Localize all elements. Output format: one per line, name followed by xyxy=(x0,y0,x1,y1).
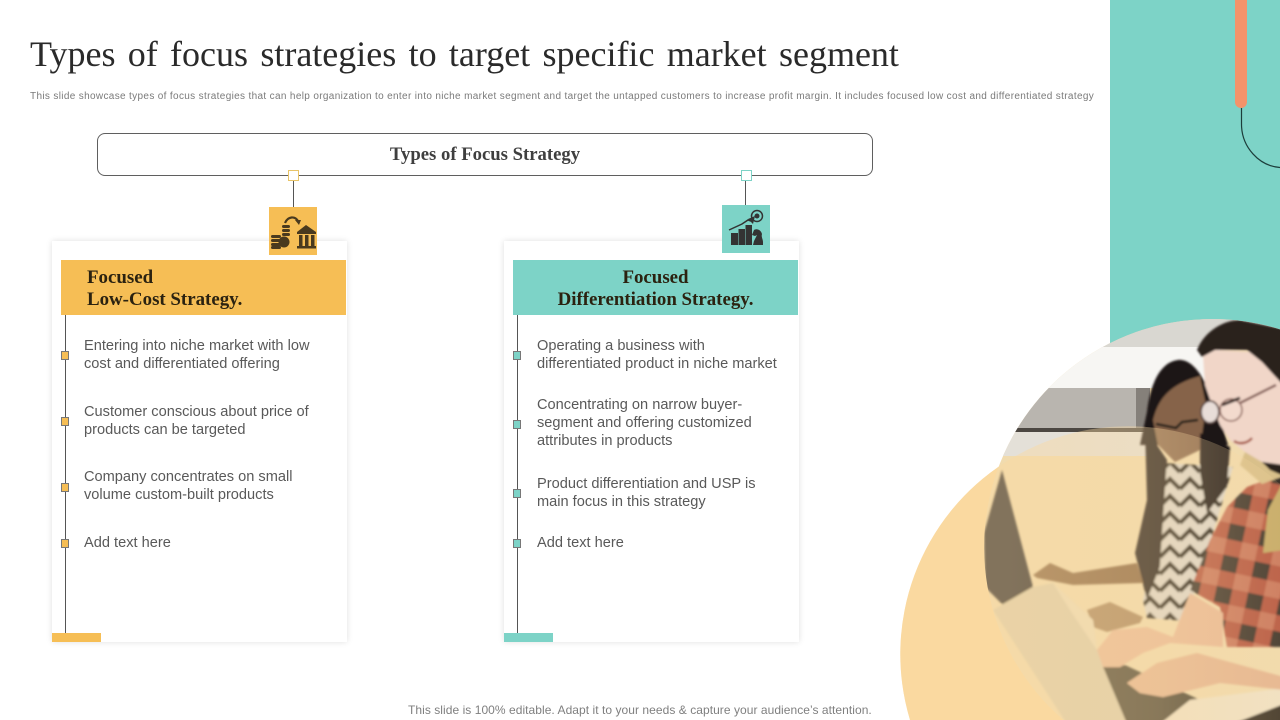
connector lines xyxy=(293,181,746,207)
footer tab xyxy=(504,633,553,642)
background woman braids xyxy=(1135,427,1167,600)
card header: low-cost: Focused Low-Cost Strategy. xyxy=(87,267,242,310)
footer tab xyxy=(52,633,101,642)
title: Types of focus strategies to target specific market segment xyxy=(30,34,899,74)
foreground woman shirt xyxy=(1190,473,1280,647)
marker 2 xyxy=(513,420,521,429)
marker 4 xyxy=(61,539,69,548)
panel: focused differentiation strategy xyxy=(504,241,799,642)
monitor xyxy=(984,470,1037,610)
icon: coins and bank xyxy=(269,207,317,255)
glasses xyxy=(1201,401,1219,423)
marker 3 xyxy=(513,489,521,498)
teal side panel xyxy=(1110,0,1280,720)
curved accent line xyxy=(1240,108,1280,168)
marker 2 xyxy=(61,417,69,426)
connector node: right xyxy=(741,170,752,181)
card header: low-cost xyxy=(61,260,346,315)
connector node: left xyxy=(288,170,299,181)
marker 1 xyxy=(61,351,69,360)
foreground woman blonde hair ends xyxy=(1263,480,1280,553)
bullet text 4: Add text here xyxy=(84,535,171,551)
bullet text 3: Product differentiation and USP is main focus in this strategy xyxy=(537,476,756,510)
icon: growth chart and chess knight xyxy=(722,205,770,253)
timeline line xyxy=(517,315,518,633)
footer note: This slide is 100% editable. Adapt it to your needs & capture your audience’s attention. xyxy=(408,703,872,717)
laptop base xyxy=(1160,688,1280,720)
laptop xyxy=(993,583,1127,720)
background woman arm and hand xyxy=(1033,563,1143,585)
bullet text 1: Operating a business with differentiated product in niche market xyxy=(537,338,777,372)
keyboard xyxy=(1103,665,1200,720)
marker 4 xyxy=(513,539,521,548)
bullet text 4: Add text here xyxy=(537,535,624,551)
dark hair at collar xyxy=(1262,462,1280,476)
photo content xyxy=(984,319,1280,720)
subtitle: This slide showcase types of focus strategies that can help organization to enter into niche market segment and target the untapped customers to increase profit margin. It includes focused low cost and differentiated strategy xyxy=(30,91,1094,102)
marker 1 xyxy=(513,351,521,360)
background woman head and hair xyxy=(1140,360,1228,445)
heading box: types of focus strategy: Types of Focus Strategy xyxy=(390,144,580,165)
card header: differentiation xyxy=(513,260,798,315)
foreground woman neck xyxy=(1240,452,1280,484)
foreground woman face xyxy=(1203,350,1280,465)
bullet text 2: Concentrating on narrow buyer- segment and offering customized attributes in products xyxy=(537,397,752,449)
solid yellow circle xyxy=(900,426,1280,720)
foreground woman forearm and hands xyxy=(1097,593,1223,667)
bullet text 3: Company concentrates on small volume custom-built products xyxy=(84,469,292,503)
bullet text 1: Entering into niche market with low cost and differentiated offering xyxy=(84,338,310,372)
background woman dress xyxy=(1143,463,1233,622)
bullet text 2: Customer conscious about price of products can be targeted xyxy=(84,404,309,438)
photo: two women working on a laptop inside overlapping circles xyxy=(900,319,1280,720)
heading box: types of focus strategy xyxy=(97,133,873,176)
orange accent bar xyxy=(1235,0,1247,108)
marker 3 xyxy=(61,483,69,492)
translucent yellow overlay on the photo xyxy=(900,426,1280,720)
card header: differentiation: Focused Differentiation Strategy. xyxy=(558,267,753,310)
panel: focused low-cost strategy xyxy=(52,241,347,642)
timeline line xyxy=(65,315,66,633)
foreground woman hair xyxy=(1197,320,1280,386)
